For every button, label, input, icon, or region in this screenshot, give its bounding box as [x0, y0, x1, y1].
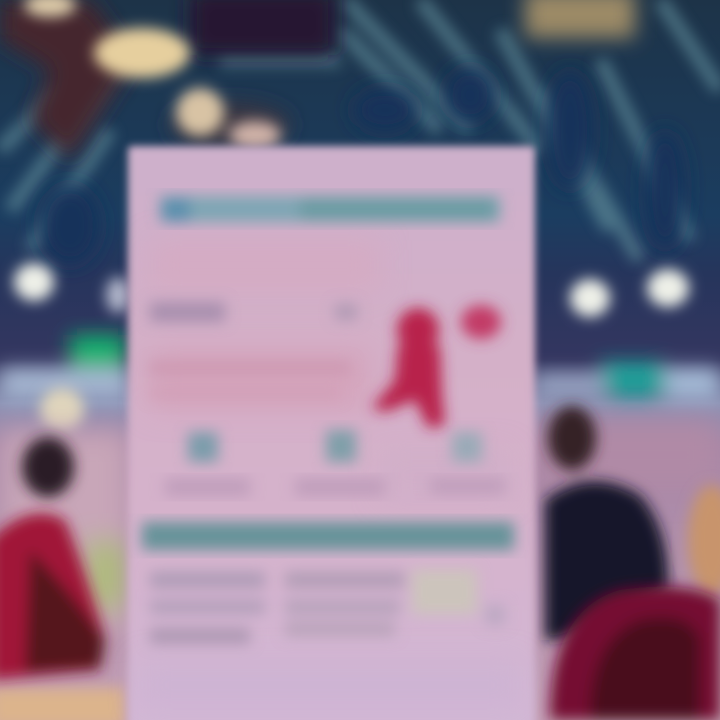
sand floor [0, 688, 125, 720]
poster subtitle text block [150, 302, 357, 398]
lower text columns [150, 570, 505, 644]
poster sheet [128, 146, 535, 720]
poster [128, 146, 535, 720]
top lights and dark banner [0, 0, 635, 160]
person left [0, 437, 105, 680]
roof trusses [0, 0, 720, 260]
poster mottling [140, 240, 520, 710]
roof shadows [40, 67, 685, 265]
poster title bar [160, 196, 500, 222]
red athlete figure [372, 305, 501, 428]
person right [545, 406, 720, 640]
lower stands [0, 420, 720, 630]
dark red seat [550, 587, 720, 720]
stadium lights and green signs [0, 263, 720, 432]
three stat icons [188, 430, 482, 462]
three stat captions [165, 478, 505, 496]
second teal heading bar [142, 522, 514, 550]
